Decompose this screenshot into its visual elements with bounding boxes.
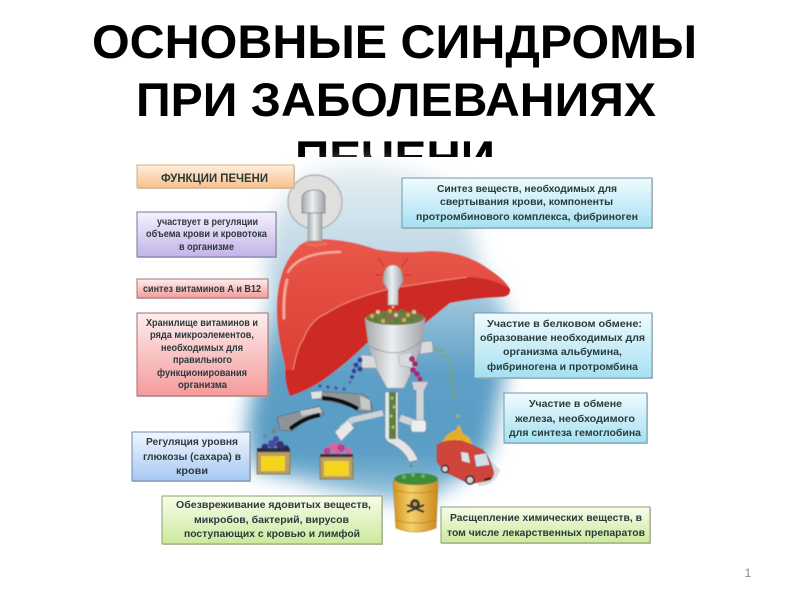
panel: регуляция кровотока: участвует в регуляции	[157, 217, 258, 228]
title	[94, 25, 694, 157]
panel: функции печени	[137, 165, 295, 189]
panel: регуляция глюкозы	[132, 432, 251, 482]
title: ПРИ ЗАБОЛЕВАНИЯХ	[136, 73, 656, 126]
panel: хранилище витаминов: функционирования	[157, 367, 247, 379]
panel: обезвреживание: микробов, бактерий, вирусов	[194, 514, 349, 526]
panel: расщепление: Расщепление химических веществ, в	[450, 513, 642, 524]
panel: регуляция кровотока: в организме	[179, 242, 234, 253]
panel: регуляция глюкозы: глюкозы (сахара) в	[143, 452, 241, 463]
panel: обмен железа: железа, необходимого	[514, 413, 635, 425]
panel: регуляция кровотока	[137, 212, 277, 258]
panel: белковый обмен: фибриногена и протромбина	[487, 361, 638, 373]
panel: хранилище витаминов: организма	[178, 380, 227, 391]
blue background cloud	[248, 164, 510, 505]
panel: обмен железа: Участие в обмене	[529, 398, 622, 410]
panel: обезвреживание: Обезвреживание ядовитых веществ,	[176, 499, 371, 511]
top pipe with disc	[288, 175, 342, 247]
liver	[277, 239, 510, 396]
panel: регуляция кровотока: объема крови и кровотока	[146, 228, 267, 240]
crate left	[257, 428, 290, 474]
small pipe in liver	[375, 258, 411, 305]
panel: синтез витаминов	[137, 279, 269, 299]
panel: обмен железа	[504, 393, 648, 444]
panel: хранилище витаминов	[137, 313, 269, 397]
purple beads stream	[409, 356, 423, 382]
panel: синтез веществ: Синтез веществ, необходимых для	[437, 183, 617, 195]
blue beads stream	[318, 357, 363, 391]
title: ПЕЧЕНИ	[295, 131, 495, 184]
slide number: 1	[745, 566, 752, 580]
truck	[437, 424, 500, 486]
panel: хранилище витаминов: Хранилище витаминов и	[146, 318, 258, 329]
title: ОСНОВНЫЕ СИНДРОМЫ	[92, 15, 697, 68]
illustration: liver machine	[248, 164, 510, 532]
left arm pipe	[334, 413, 383, 450]
panel: синтез веществ: протромбинового комплекса, фибриноген	[416, 211, 638, 223]
panel: синтез веществ: свертывания крови, компоненты	[440, 197, 613, 208]
green beads stream to truck	[434, 347, 460, 418]
panel: белковый обмен	[474, 313, 653, 379]
panel: обезвреживание	[162, 496, 383, 545]
panel: белковый обмен: Участие в белковом обмене:	[487, 318, 642, 330]
funnel contents beads	[370, 302, 421, 323]
funnel	[361, 311, 433, 388]
barrel with hazard symbol	[393, 473, 438, 532]
conveyor upper	[311, 391, 372, 412]
crate right	[320, 443, 353, 479]
panel: хранилище витаминов: необходимых для	[161, 342, 243, 354]
panel: белковый обмен: организма альбумина,	[503, 346, 622, 358]
panel: хранилище витаминов: ряда микроэлементов,	[150, 330, 254, 341]
panel: расщепление	[441, 507, 651, 544]
panel: обмен железа: для синтеза гемоглобина	[509, 427, 641, 439]
right pipe cap	[412, 382, 428, 390]
central spout with green content	[385, 392, 418, 468]
right elbow pipe	[400, 386, 420, 425]
panel: хранилище витаминов: правильного	[173, 355, 232, 366]
panel: расщепление: том числе лекарственных препаратов	[447, 528, 645, 539]
panel: синтез веществ	[402, 178, 653, 229]
panel: обезвреживание: поступающих с кровью и лимфой	[184, 528, 360, 540]
panel: регуляция глюкозы: крови	[176, 466, 208, 477]
panel: белковый обмен: образование необходимых для	[480, 332, 645, 344]
panel: синтез витаминов: синтез витаминов А и В12	[143, 284, 261, 295]
panel: функции печени: ФУНКЦИИ ПЕЧЕНИ	[161, 171, 268, 185]
panel: регуляция глюкозы: Регуляция уровня	[146, 437, 238, 448]
right pipe joint	[411, 420, 426, 432]
conveyor lower	[277, 406, 324, 431]
